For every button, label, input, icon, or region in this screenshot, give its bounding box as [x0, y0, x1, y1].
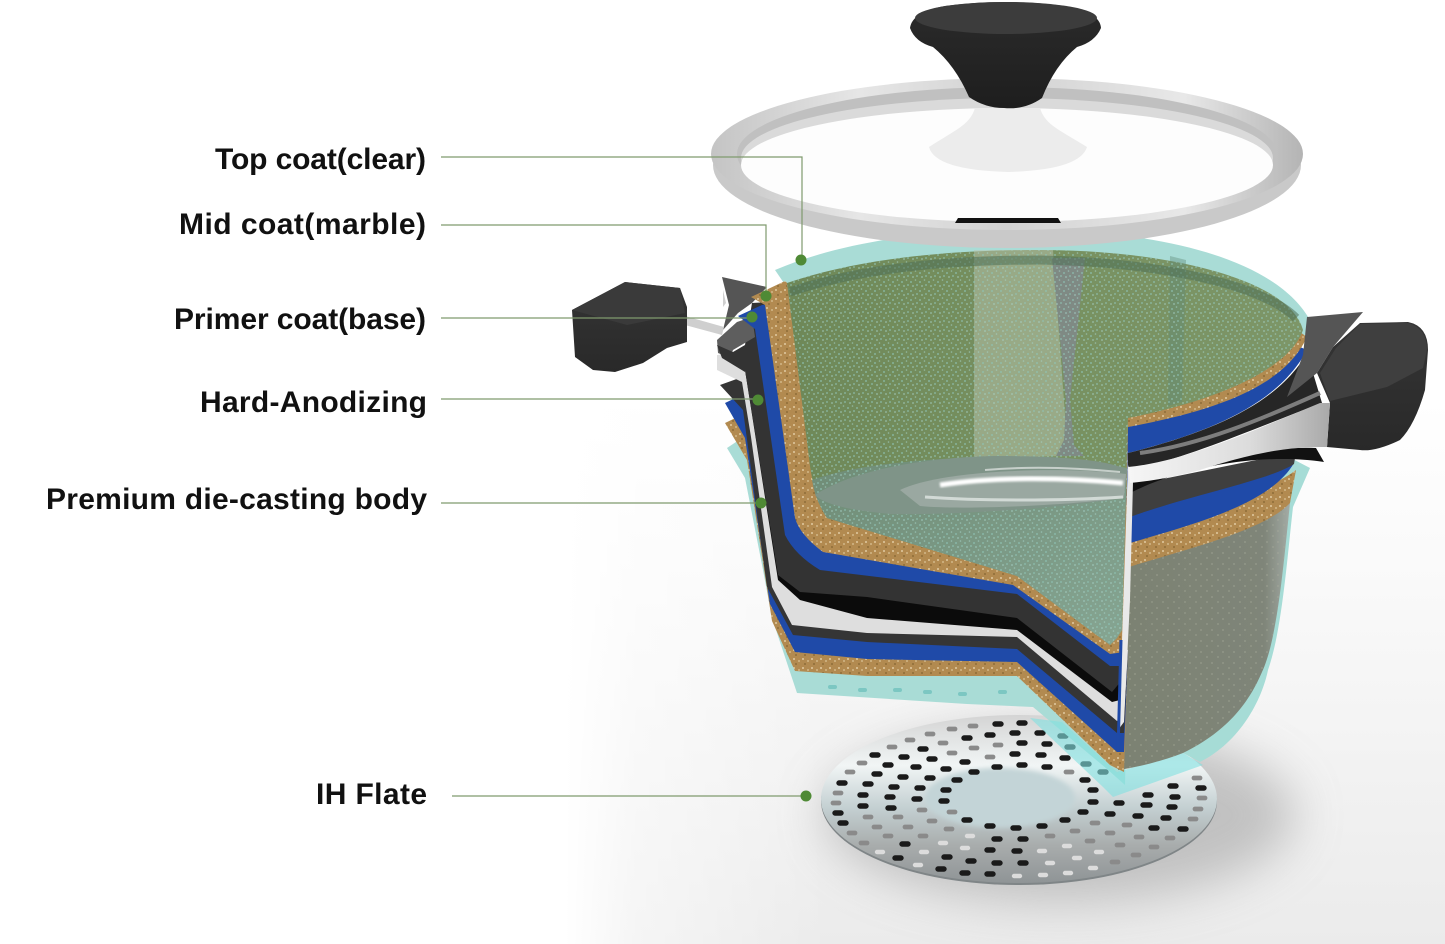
label: hard anodizing: Hard-Anodizing	[200, 386, 427, 419]
light reflected panel	[974, 250, 1068, 458]
reflected spike	[1052, 258, 1085, 456]
grey mounting plate	[1287, 312, 1363, 397]
left section lower shells	[717, 277, 1128, 772]
dark reflection at lid front	[955, 218, 1061, 223]
right-hand bracket and handle	[1128, 312, 1428, 483]
dark rim shading	[790, 260, 1296, 318]
right side lower cut bands	[1129, 448, 1324, 567]
glass lid	[711, 2, 1303, 248]
dark grey hard-anodized layer	[745, 300, 1128, 692]
upper-left metal flanges	[722, 277, 767, 330]
background floor shading	[565, 400, 1445, 944]
lower dark shell	[720, 370, 1128, 733]
tan marble coat	[751, 281, 1307, 654]
blue primer layer	[738, 262, 1307, 666]
black inner shell	[745, 360, 1126, 702]
teal strip overlapping the plate	[1030, 718, 1203, 797]
label: die-casting body: Premium die-casting body	[46, 483, 427, 516]
plate holes: dark	[835, 723, 1204, 874]
pot interior	[787, 250, 1303, 645]
label: mid coat	[179, 208, 772, 302]
lid skirt	[713, 82, 1301, 248]
label: top coat: Top coat(clear)	[215, 143, 426, 176]
knob top surface	[915, 2, 1097, 34]
blue edge of right wall	[1118, 640, 1121, 752]
grey metal strip	[1140, 393, 1320, 453]
floor metal ring	[815, 456, 1127, 514]
label: IH plate: IH Flate	[316, 778, 427, 811]
outer translucent coat: wall and bottom shell	[727, 430, 1310, 785]
white metal body	[717, 350, 1128, 721]
IH plate	[821, 715, 1217, 885]
black strip	[1130, 448, 1324, 492]
lower tan band	[1129, 470, 1296, 567]
lid knob	[910, 2, 1101, 108]
lower blue band	[1130, 463, 1294, 543]
glass knob reflection	[929, 108, 1087, 172]
label: top coat	[215, 143, 806, 266]
label: primer coat	[174, 303, 758, 336]
left-hand handle	[572, 282, 724, 372]
label: primer coat: Primer coat(base)	[174, 303, 426, 336]
plate holes: grey	[833, 726, 1205, 862]
speckle texture	[787, 250, 1303, 645]
lower blue shell	[725, 390, 1128, 752]
shiny bracket	[1128, 403, 1330, 483]
plate holes: light	[877, 836, 1102, 876]
label: die-casting body	[46, 483, 766, 516]
label: mid coat: Mid coat(marble)	[179, 208, 426, 241]
label: hard anodizing	[200, 386, 764, 419]
outer pot wall	[1118, 503, 1290, 770]
label: IH plate	[316, 778, 812, 811]
floor of pot	[812, 457, 1127, 645]
lower dark band	[1130, 452, 1296, 517]
top teal clear coat rim	[775, 230, 1311, 345]
lower tan shell	[725, 400, 1128, 772]
dark band under the blue on the right	[1128, 353, 1322, 470]
lid steel ring	[711, 78, 1303, 230]
right interior darker stripe	[1168, 256, 1186, 406]
black handle	[1317, 322, 1428, 450]
gasket	[737, 87, 1277, 221]
section right wall sliver	[1118, 465, 1133, 730]
glass	[741, 108, 1273, 222]
